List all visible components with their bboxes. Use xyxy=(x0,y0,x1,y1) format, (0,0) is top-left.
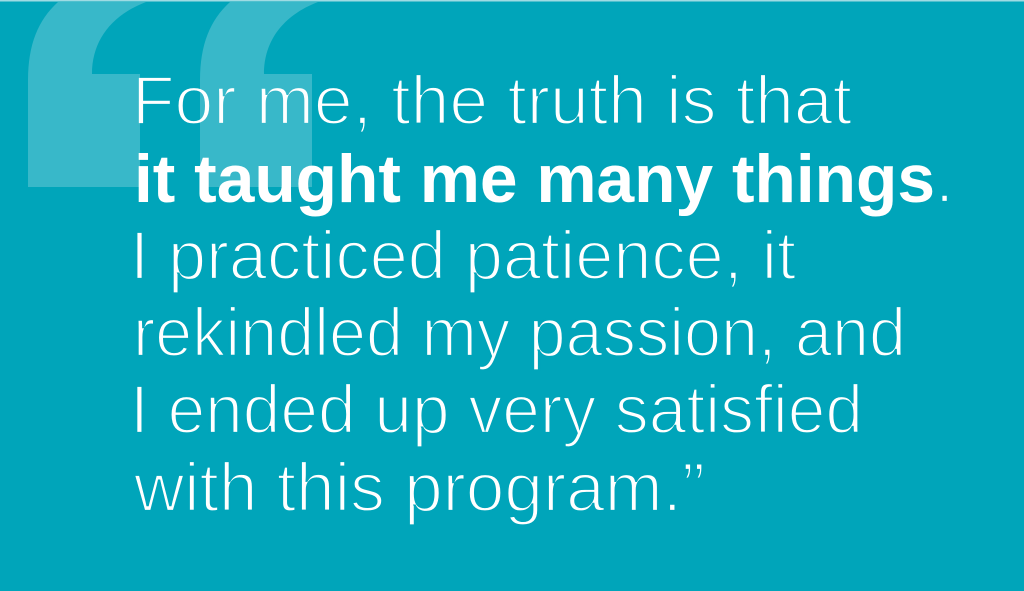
icon: large opening quotation mark xyxy=(28,2,318,187)
line 2: bold emphasis: it taught me many things. xyxy=(134,140,954,217)
line 3: I practiced patience, it xyxy=(130,217,796,294)
quote text xyxy=(130,62,954,526)
line 5: I ended up very satisfied xyxy=(130,371,863,448)
line 6: with this program.” xyxy=(133,449,705,526)
line 1: For me, the truth is that xyxy=(132,62,852,139)
line 4: rekindled my passion, and xyxy=(133,294,906,371)
